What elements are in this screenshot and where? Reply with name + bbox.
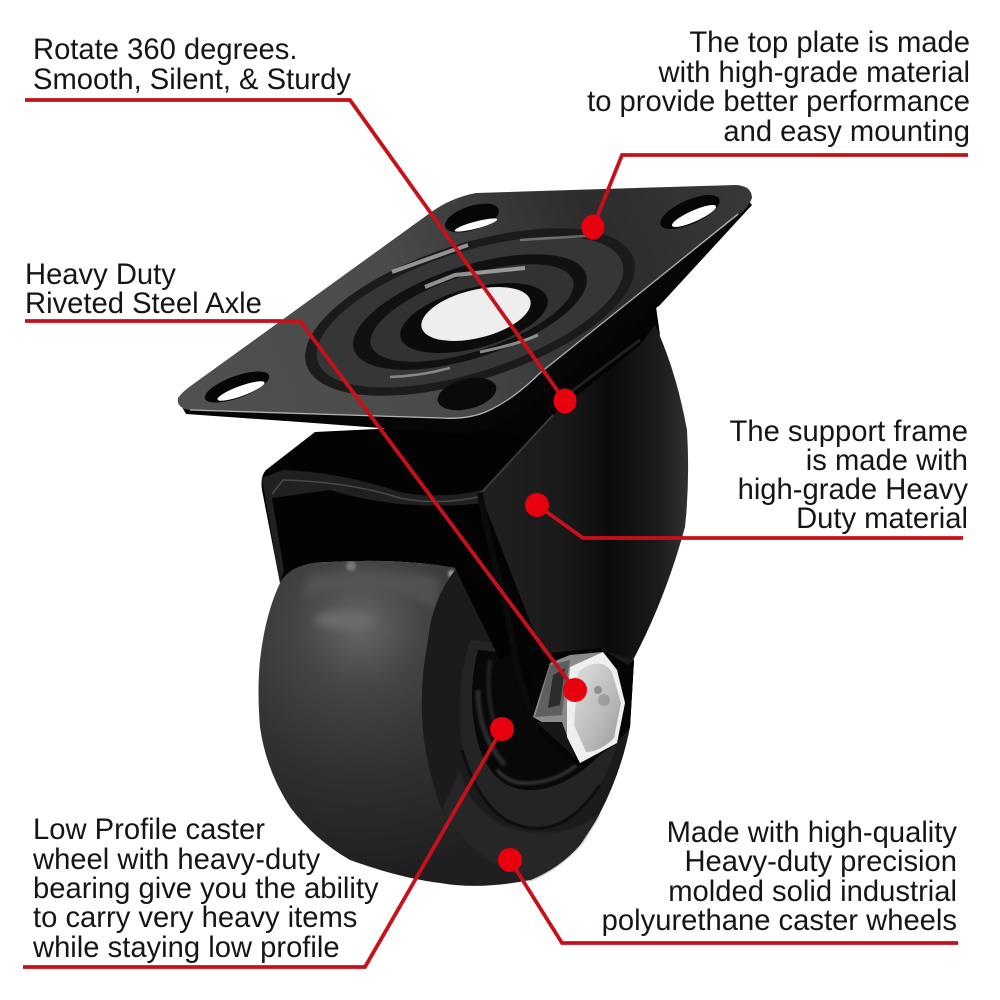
callout: top plate: to provide better performance xyxy=(587,86,970,118)
callout: low profile: wheel with heavy-duty xyxy=(32,844,321,876)
bearing rings xyxy=(285,194,655,430)
callout: rotate 360: Smooth, Silent, & Sturdy xyxy=(33,64,351,96)
callout: support frame xyxy=(525,416,968,538)
center rivet xyxy=(416,277,536,351)
callout: support frame: high-grade Heavy xyxy=(738,474,968,506)
yoke and swivel beneath plate xyxy=(262,300,660,660)
plate thickness edge xyxy=(178,190,752,434)
callout: top plate: and easy mounting xyxy=(723,116,970,148)
callout: rotate 360 xyxy=(25,34,576,414)
callout: polyurethane wheels: Made with high-quality xyxy=(667,817,957,849)
callout: top plate xyxy=(582,27,970,240)
callout: top plate: The top plate is made xyxy=(689,27,970,59)
callout: low profile: to carry very heavy items xyxy=(33,902,357,934)
support frame arm xyxy=(480,325,688,768)
callout: polyurethane wheels xyxy=(498,817,958,943)
callout: axle xyxy=(25,259,587,702)
caster wheel product illustration xyxy=(178,185,752,886)
wheel xyxy=(258,561,634,886)
callout: polyurethane wheels: polyurethane caster wheels xyxy=(602,905,957,937)
callout: low profile: bearing give you the ability xyxy=(33,873,379,905)
callout: support frame: The support frame xyxy=(730,416,968,448)
callout: rotate 360: Rotate 360 degrees. xyxy=(33,34,298,66)
callout: support frame: Duty material xyxy=(796,503,968,535)
callout: polyurethane wheels: molded solid industrial xyxy=(668,876,957,908)
callout: axle: Riveted Steel Axle xyxy=(25,288,262,320)
axle bolt xyxy=(533,652,625,763)
mounting holes xyxy=(201,188,724,416)
callout: low profile: while staying low profile xyxy=(32,932,340,964)
callout: low profile: Low Profile caster xyxy=(33,814,265,846)
callout: low profile xyxy=(23,717,514,967)
hub rings xyxy=(460,640,625,828)
callout: support frame: is made with xyxy=(806,445,968,477)
top mounting plate xyxy=(178,185,752,430)
callout: top plate: with high-grade material xyxy=(658,57,970,89)
callout: polyurethane wheels: Heavy-duty precision xyxy=(684,846,957,878)
callout: axle: Heavy Duty xyxy=(25,259,176,291)
